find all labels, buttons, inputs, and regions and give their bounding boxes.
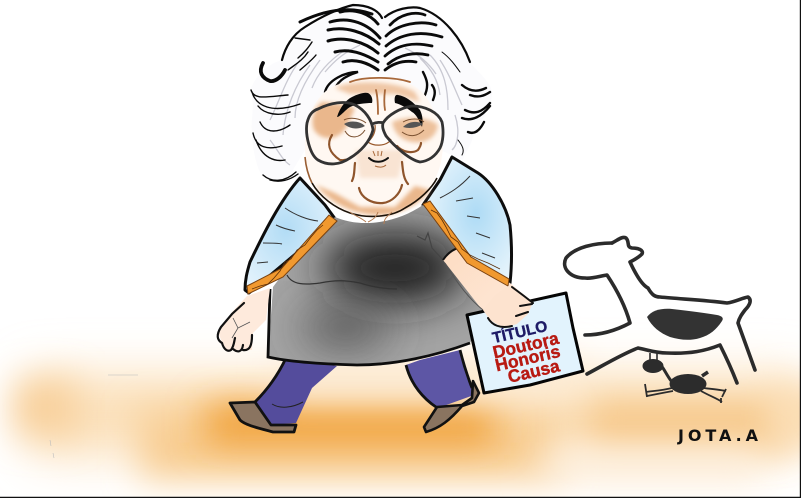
figure: hand on sign — [483, 285, 533, 328]
figure: right cape — [423, 157, 512, 283]
figure: orange trim right — [423, 201, 509, 286]
face: cheek and chin creases — [329, 135, 421, 203]
face: forehead lines — [350, 78, 410, 114]
small animal under the cow — [643, 353, 726, 403]
figure: legs and shoes — [230, 350, 479, 432]
face: eyebrows — [337, 93, 372, 117]
face — [305, 78, 443, 224]
face: jaw outline — [312, 178, 437, 216]
figure: grey dress — [268, 205, 486, 365]
sign: line one: Doutora — [491, 328, 561, 362]
specks on ground — [50, 375, 138, 458]
hair — [250, 5, 492, 183]
face: peach skin shading — [312, 82, 438, 215]
right trouser leg — [406, 350, 474, 408]
background: orange ground wash — [15, 358, 801, 480]
face: upper side contour — [305, 157, 312, 183]
cow drawing — [565, 237, 755, 383]
sign: line three: Causa — [506, 355, 562, 387]
sign: heading: TÍTULO — [491, 318, 549, 347]
right shoe — [424, 381, 479, 432]
trim scribbles — [252, 210, 500, 289]
neck folds — [350, 212, 392, 224]
figure: right arm — [443, 247, 532, 328]
sign: line two: Honoris — [493, 341, 562, 375]
signature: JOTA.A — [677, 426, 759, 445]
face: nose — [368, 125, 391, 145]
sign: paper — [467, 293, 583, 393]
figure: left cape — [245, 178, 336, 293]
left trouser leg — [255, 358, 337, 425]
figure: orange trim left — [247, 215, 337, 294]
left shoe — [230, 402, 296, 432]
figure: left arm and hand — [218, 288, 270, 351]
hair: grey lines — [270, 45, 462, 165]
face: eyes — [344, 122, 423, 128]
cape fold marks — [257, 176, 495, 263]
face: glasses — [307, 102, 443, 164]
hair: outline and black strokes — [251, 5, 490, 181]
cow spot — [647, 309, 723, 340]
face: mouth and moustache — [369, 158, 388, 162]
